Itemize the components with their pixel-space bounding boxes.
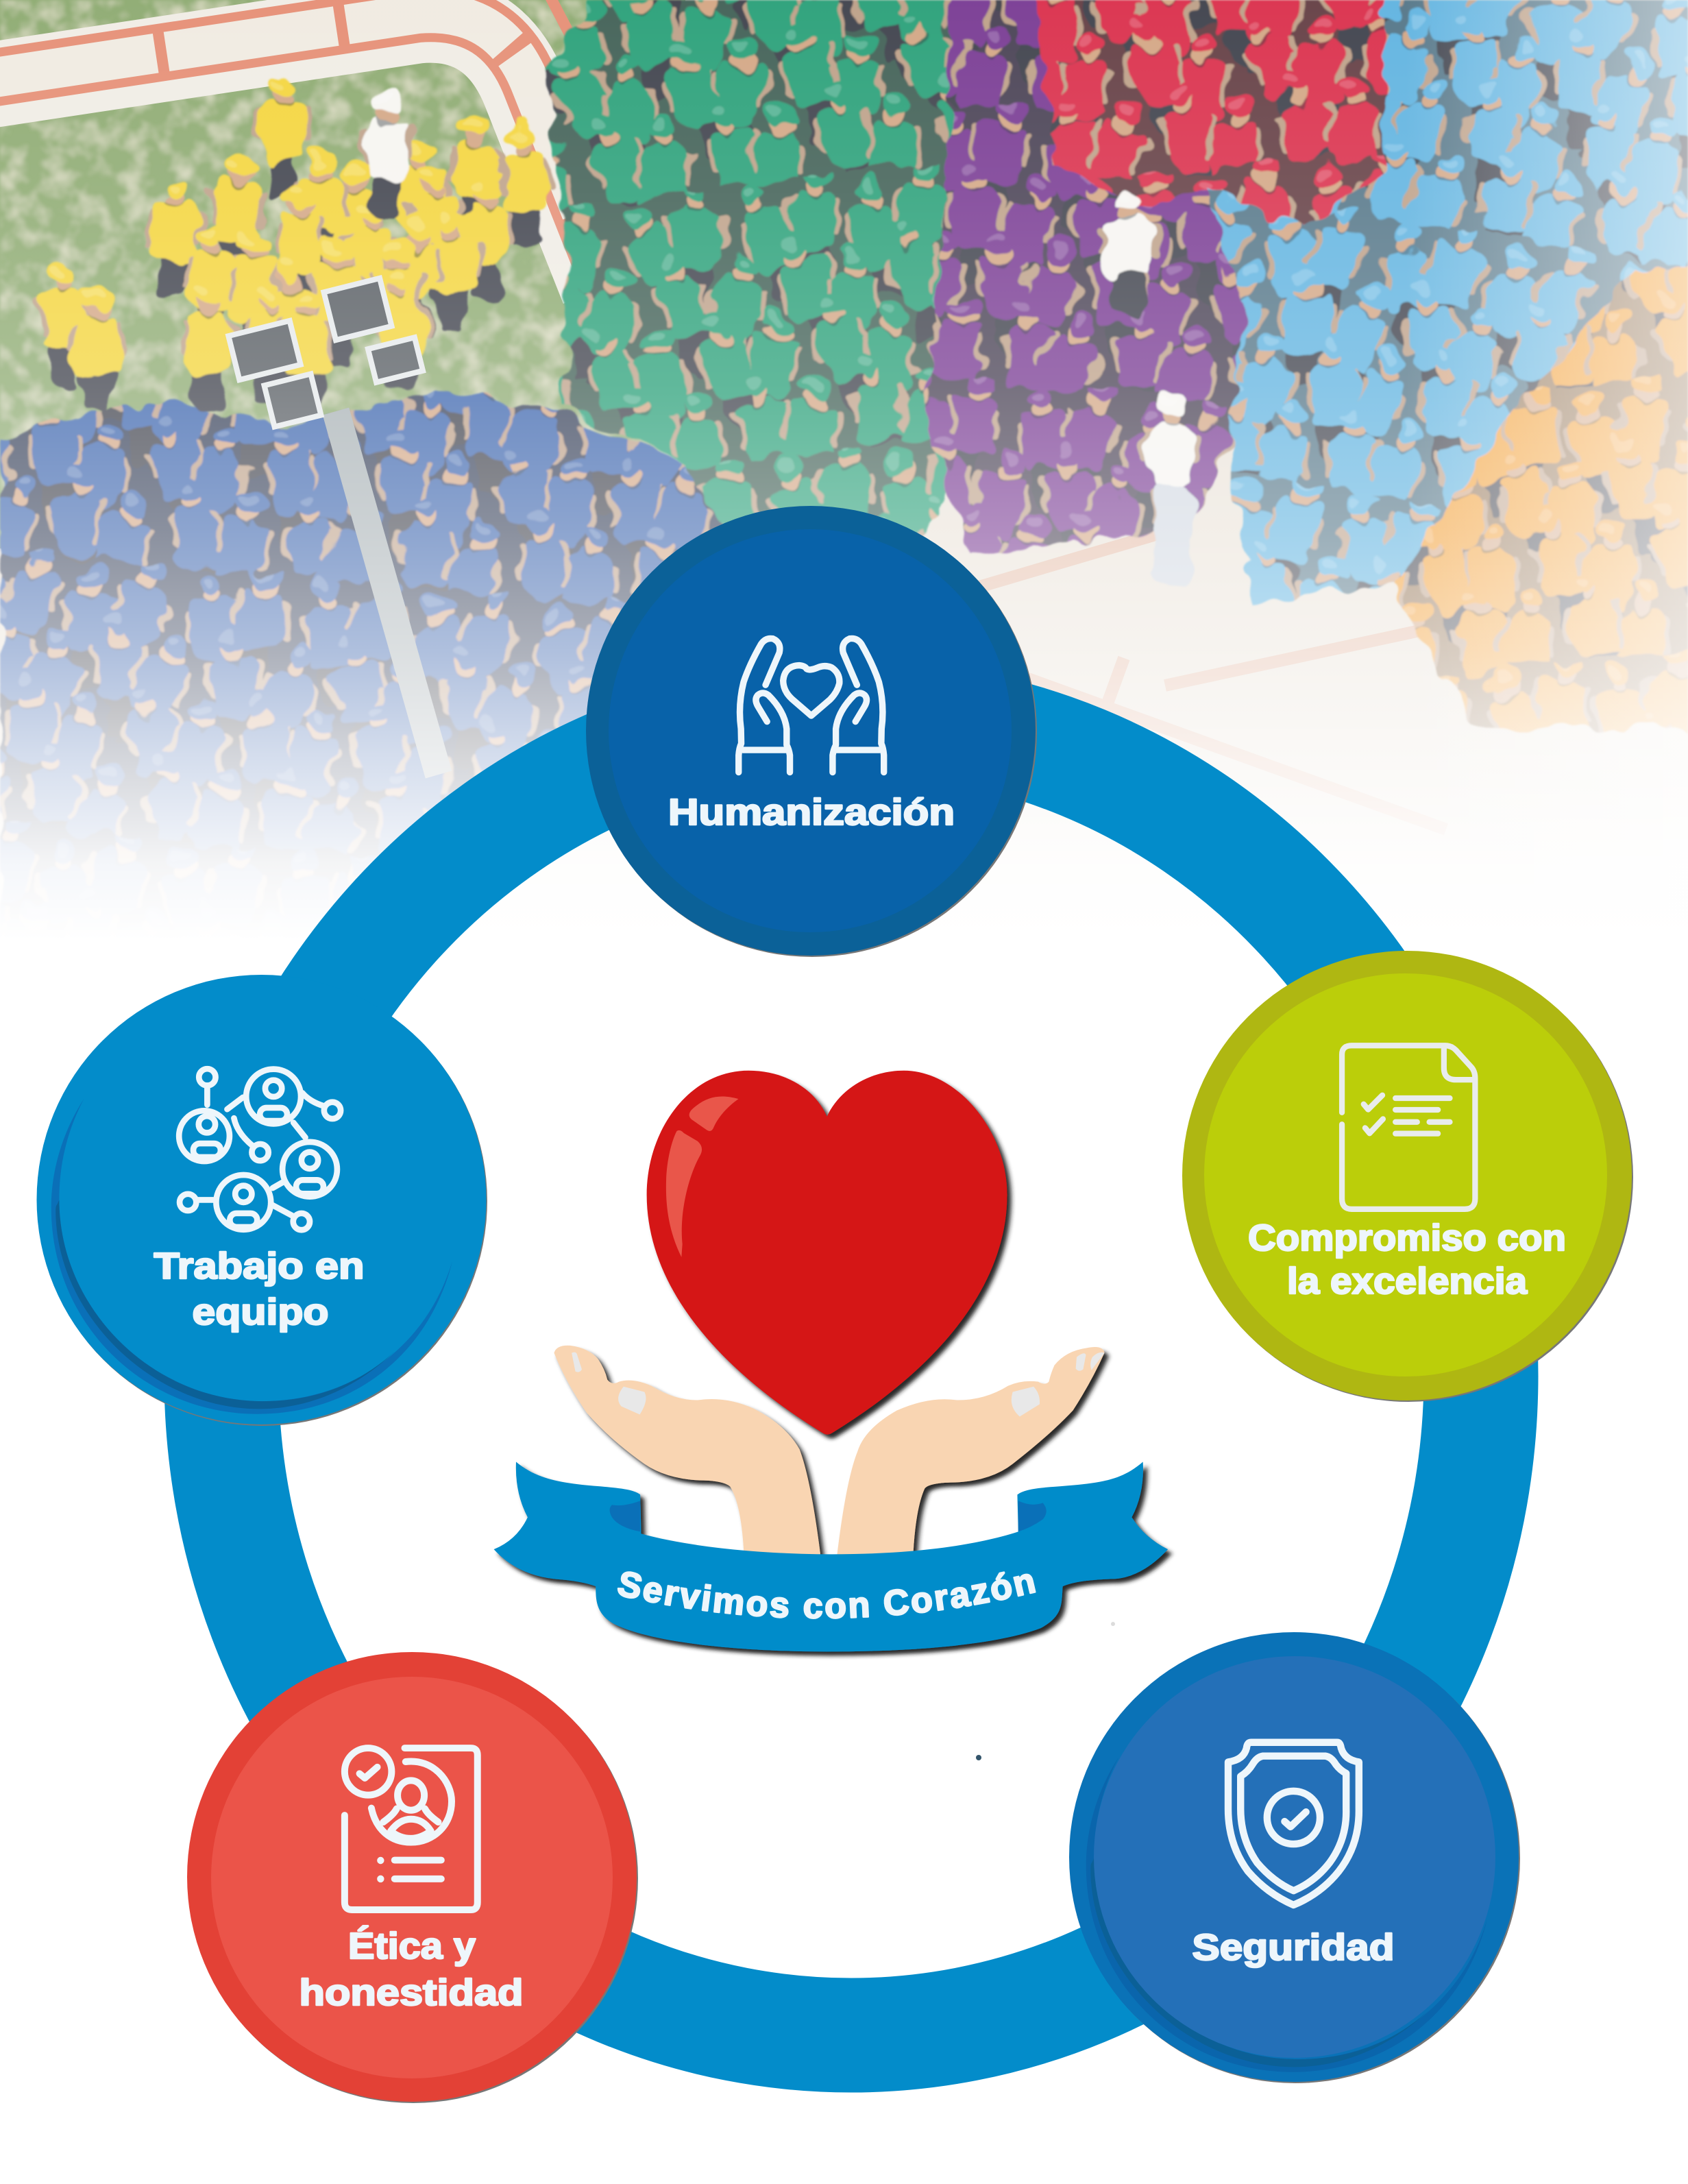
ribbon folds — [610, 1501, 1047, 1531]
value: Humanización — [586, 506, 1037, 957]
label: Humanización — [668, 792, 955, 833]
value: Ética y honestidad — [187, 1652, 638, 2103]
label — [299, 1926, 524, 2013]
blue ring connecting the values — [221, 716, 1481, 2035]
walkway — [0, 0, 637, 288]
circle — [187, 1652, 638, 2103]
circle — [586, 506, 1037, 957]
circle — [1182, 951, 1633, 1402]
orange team — [1391, 267, 1688, 727]
stadium lamps — [228, 278, 423, 427]
people in white shirts — [358, 94, 1200, 583]
heart highlights — [666, 1096, 738, 1257]
yellow team — [36, 75, 552, 409]
label — [154, 1246, 365, 1333]
label: honestidad — [299, 1972, 524, 2013]
label: Seguridad — [1192, 1927, 1394, 1968]
icon: connected people network — [179, 1069, 341, 1230]
navy team — [0, 391, 768, 973]
white fade — [0, 0, 1688, 960]
crowd groups by shirt colour — [0, 0, 1688, 973]
icon: profile document — [345, 1748, 478, 1910]
pavement — [0, 0, 1688, 960]
right side fade — [1405, 0, 1688, 960]
label: equipo — [192, 1291, 329, 1333]
label — [1248, 1217, 1566, 1302]
icon: shield with check — [1228, 1743, 1359, 1905]
light pole — [336, 411, 439, 775]
label: Compromiso con — [1248, 1217, 1566, 1259]
hands — [554, 1346, 1105, 1558]
background crowd photo — [0, 0, 1688, 973]
label: Ética y — [348, 1926, 476, 1967]
ribbon — [494, 1461, 1168, 1651]
label: la excelencia — [1287, 1261, 1528, 1302]
sky blue team — [1206, 0, 1688, 603]
purple team — [925, 0, 1261, 555]
label: Trabajo en — [154, 1246, 365, 1287]
circle — [1069, 1632, 1520, 2083]
icon: hands holding heart — [739, 638, 884, 773]
heart — [647, 1071, 1007, 1435]
green team — [548, 0, 980, 562]
value: Seguridad — [1069, 1632, 1520, 2083]
icon: document checklist — [1342, 1045, 1475, 1209]
red team — [1035, 0, 1412, 233]
grass — [0, 0, 685, 548]
value: Compromiso con la excelencia — [1182, 951, 1633, 1402]
central emblem: heart, hands and banner — [493, 1071, 1175, 1659]
banner text: Servimos con Corazón — [617, 1571, 1036, 1619]
small specks — [976, 1622, 1115, 1760]
circle — [37, 975, 487, 1426]
pavement brick lines — [877, 528, 1611, 829]
value: Trabajo en equipo — [37, 975, 487, 1426]
fingernails — [572, 1352, 1105, 1417]
